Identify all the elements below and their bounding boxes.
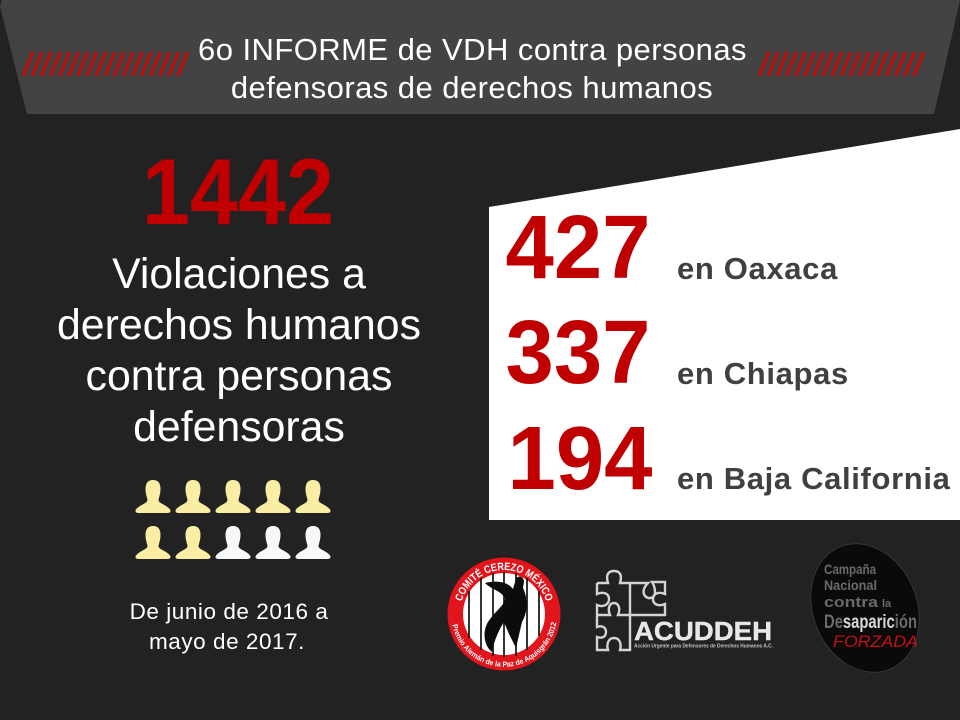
headline number 1442: 1442 (142, 139, 334, 244)
figure: Oaxaca (506, 198, 838, 298)
panel: state figures (489, 129, 960, 520)
title: defensoras de derechos humanos (231, 70, 713, 105)
figure: Baja California (508, 409, 951, 509)
logo: ACUDDEH: Acción Urgente para Defensores de Derechos Humanos A.C. (634, 644, 774, 650)
figure: Oaxaca: 427 (506, 198, 650, 298)
left hatch decoration (23, 52, 188, 76)
description text: derechos humanos (57, 301, 421, 349)
figure: Baja California: en Baja California (677, 461, 951, 496)
logo: Comité Cerezo México: Premio Alemán de la Paz de Aquisgrán 2012 (452, 622, 556, 667)
figure: Chiapas: en Chiapas (677, 356, 849, 391)
logo: Campaña Nacional contra la Desaparición Forzada: FORZADA (833, 632, 918, 651)
logo: Campaña Nacional contra la Desaparición Forzada (792, 527, 938, 689)
logo: Campaña Nacional contra la Desaparición Forzada: la (882, 598, 892, 610)
logo: Campaña Nacional contra la Desaparición Forzada: Desaparición (824, 612, 917, 633)
logo: Campaña Nacional contra la Desaparición Forzada: contra (824, 594, 879, 611)
logo: Comité Cerezo México: COMITÉ CEREZO MÉXICO (456, 562, 552, 600)
figure: Chiapas: 337 (506, 303, 650, 403)
title: 6o INFORME de VDH contra personas (198, 32, 747, 67)
figure: Chiapas (506, 303, 849, 403)
description text: defensoras (133, 403, 345, 451)
date range text: De junio de 2016 a (130, 599, 328, 624)
figure: Baja California: 194 (508, 409, 652, 509)
logo: ACUDDEH (597, 571, 774, 650)
figure: Oaxaca: en Oaxaca (677, 251, 838, 286)
date range text: mayo de 2017. (149, 629, 305, 654)
title banner (0, 0, 960, 114)
logo: Campaña Nacional contra la Desaparición Forzada: Nacional (824, 577, 877, 593)
logo: ACUDDEH: ACUDDEH (634, 616, 772, 646)
pictogram: people icons (136, 480, 330, 559)
description text: Violaciones a (112, 250, 366, 298)
description text: contra personas (86, 352, 392, 400)
logo: Comité Cerezo México (448, 558, 560, 670)
right hatch decoration (759, 52, 924, 76)
logo: Campaña Nacional contra la Desaparición Forzada: Campaña (824, 561, 876, 577)
